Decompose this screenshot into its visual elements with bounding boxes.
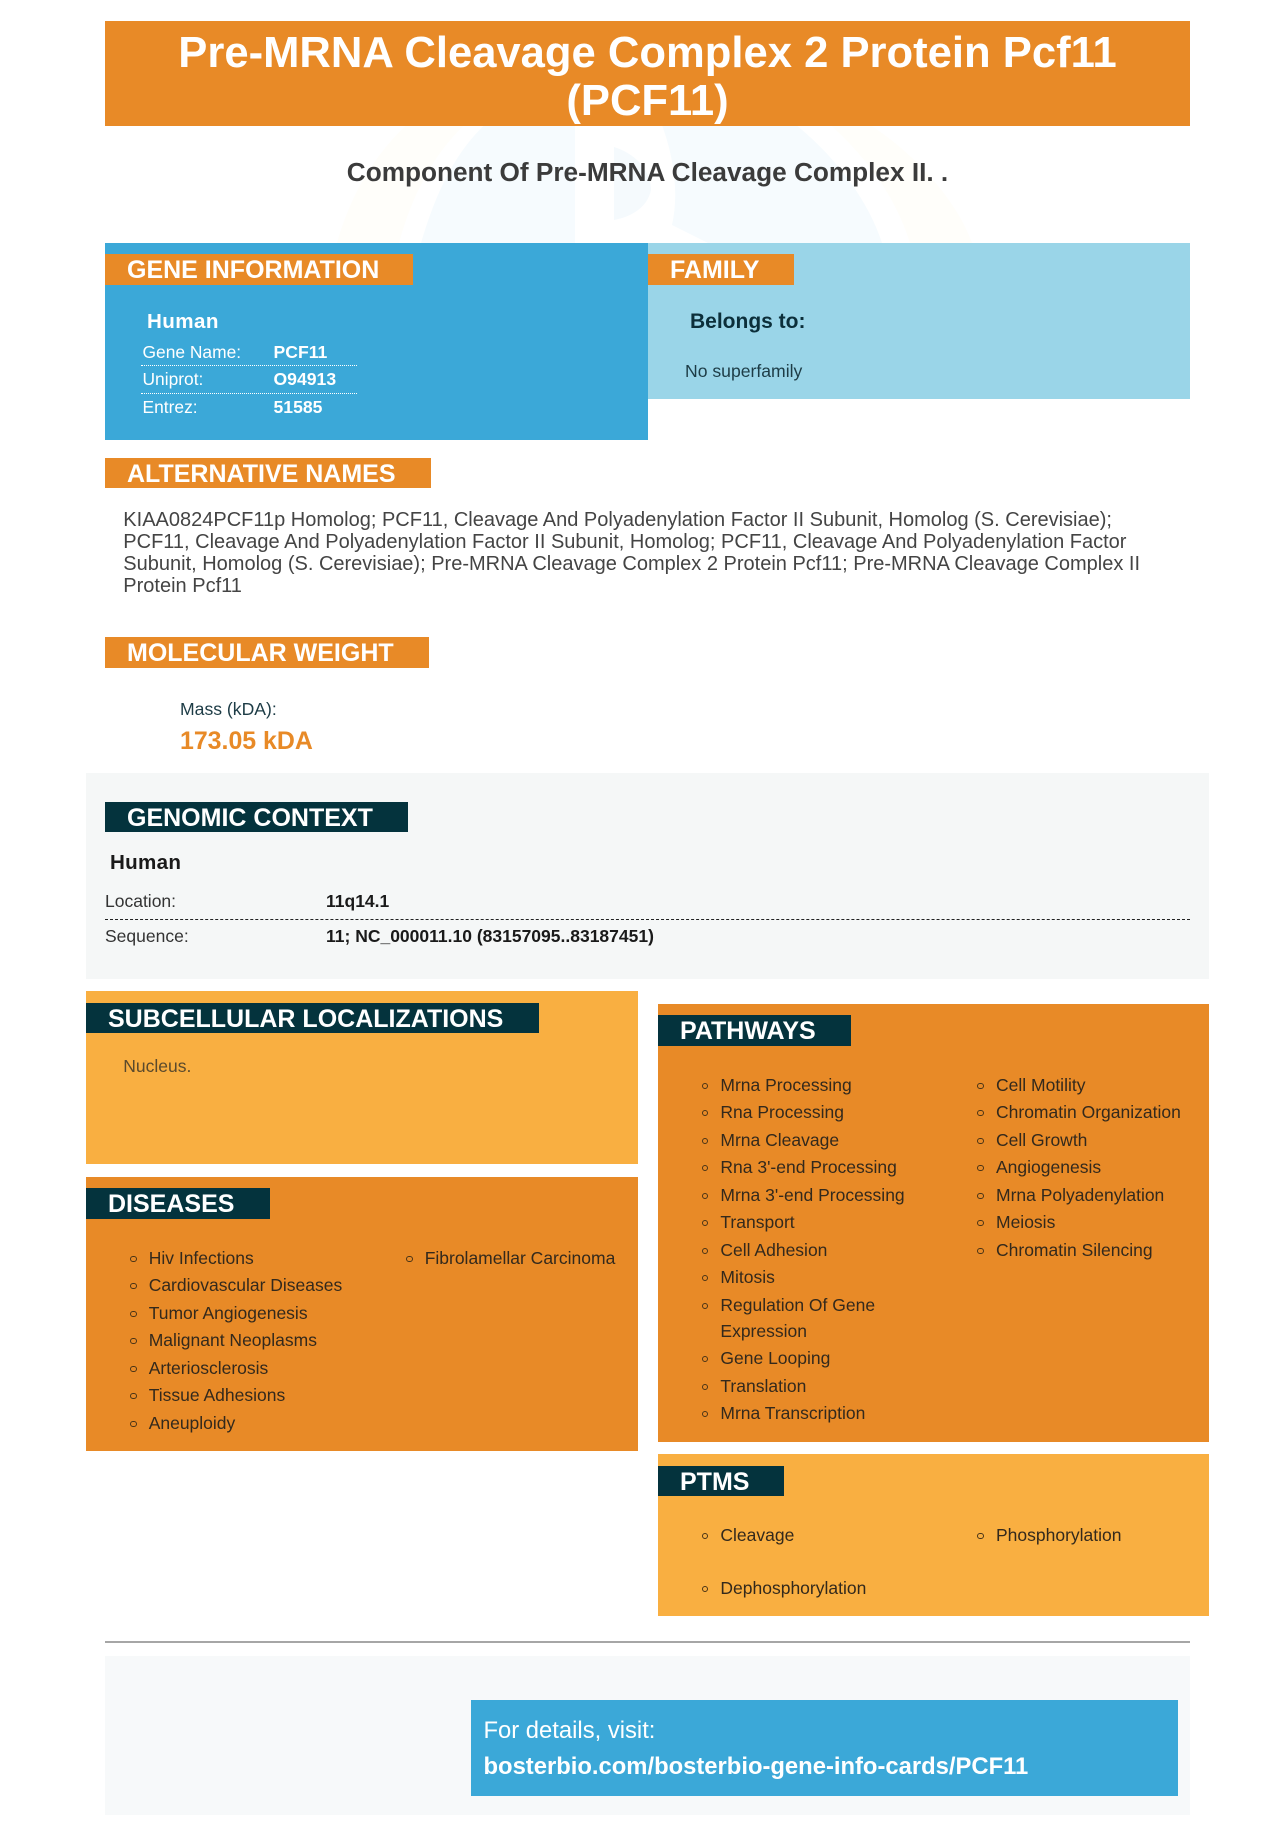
pathways list: Chromatin Silencing: [996, 1240, 1153, 1260]
heading: gene information: GENE INFORMATION: [127, 256, 379, 284]
gene name row: Gene Name:: [142, 342, 241, 362]
mass label: Mass (kDA):: [180, 698, 277, 718]
alternative names text: Subunit, Homolog (S. Cerevisiae); Pre-MRNA Cleavage Complex 2 Protein Pcf11; Pre-MRNA Cleavage Complex II: [123, 553, 1140, 575]
sequence row: 11; NC_000011.10 (83157095..83187451): [326, 926, 654, 946]
location row: [105, 886, 1190, 920]
heading: diseases: DISEASES: [108, 1190, 234, 1218]
heading: pathways: PATHWAYS: [680, 1016, 816, 1044]
panel: ptms: [658, 1454, 1209, 1616]
pathways list: Gene Looping: [720, 1348, 830, 1368]
pathways list: Cell Growth: [996, 1130, 1087, 1150]
diseases list: Arteriosclerosis: [149, 1358, 268, 1378]
panel: footer: [105, 1656, 1190, 1815]
diseases list: [130, 1248, 616, 1433]
sequence row: Sequence:: [105, 926, 189, 946]
heading: family: [648, 254, 794, 285]
heading: family: FAMILY: [670, 256, 759, 284]
location row: 11q14.1: [326, 891, 389, 911]
gene name row: [141, 337, 357, 366]
heading: alternative names: ALTERNATIVE NAMES: [127, 460, 396, 488]
diseases list: Fibrolamellar Carcinoma: [425, 1248, 615, 1268]
title banner: [105, 21, 1190, 126]
pathways list: Angiogenesis: [996, 1157, 1101, 1177]
heading: genomic context: GENOMIC CONTEXT: [127, 804, 373, 832]
panel: subcellular localizations: [86, 991, 638, 1164]
heading: ptms: [658, 1466, 784, 1496]
panel: diseases: [86, 1177, 638, 1451]
diseases list: Malignant Neoplasms: [149, 1330, 317, 1350]
heading: subcellular localizations: SUBCELLULAR LOCALIZATIONS: [108, 1005, 503, 1033]
pathways list: Cell Motility: [996, 1075, 1085, 1095]
entrez row: Entrez:: [142, 397, 198, 417]
pathways list: Rna Processing: [720, 1102, 844, 1122]
pathways list: Cell Adhesion: [720, 1240, 827, 1260]
ptms list: Dephosphorylation: [720, 1578, 866, 1598]
diseases list: Tumor Angiogenesis: [149, 1303, 308, 1323]
background watermark logo: [422, 126, 882, 243]
pathways list: Mrna 3'-end Processing: [720, 1185, 905, 1205]
panel: gene information: [105, 243, 648, 440]
alternative names text: [123, 509, 1140, 597]
pathways list: [702, 1075, 1181, 1423]
pathways list: Regulation Of Gene: [720, 1295, 875, 1315]
mass value: 173.05 kDA: [180, 727, 313, 755]
pathways list: Meiosis: [996, 1212, 1055, 1232]
visit label: For details, visit:: [484, 1716, 655, 1744]
uniprot row: O94913: [274, 369, 336, 389]
panel: family: [648, 243, 1190, 399]
location row: Location:: [105, 891, 176, 911]
heading: molecular weight: MOLECULAR WEIGHT: [127, 638, 394, 666]
pathways list: Mrna Cleavage: [720, 1130, 839, 1150]
species label: Human: [110, 851, 181, 874]
pathways list: Mrna Polyadenylation: [996, 1185, 1164, 1205]
alternative names text: Protein Pcf11: [123, 575, 242, 597]
pathways list: Rna 3'-end Processing: [720, 1157, 897, 1177]
ptms list: Cleavage: [720, 1525, 794, 1545]
url: bosterbio.com/bosterbio-gene-info-cards/PCF11: [484, 1752, 1028, 1780]
pathways list: Expression: [720, 1321, 807, 1341]
pathways list: Transport: [720, 1212, 795, 1232]
alternative names text: PCF11, Cleavage And Polyadenylation Factor II Subunit, Homolog; PCF11, Cleavage And Polyadenylation Factor: [123, 531, 1126, 553]
ptms list: [702, 1525, 1122, 1598]
heading: diseases: [86, 1188, 270, 1219]
superfamily value: No superfamily: [685, 361, 802, 381]
title banner: (PCF11): [566, 76, 729, 124]
panel: pathways: [658, 1004, 1209, 1442]
panel: genomic context: [86, 773, 1209, 979]
pathways list: Mrna Processing: [720, 1075, 852, 1095]
ptms list: Phosphorylation: [996, 1525, 1122, 1545]
entrez row: [142, 397, 322, 417]
diseases list: Tissue Adhesions: [149, 1385, 285, 1405]
subtitle: Component Of Pre-MRNA Cleavage Complex II. .: [347, 156, 948, 186]
pathways list: Chromatin Organization: [996, 1102, 1181, 1122]
heading: pathways: [658, 1015, 851, 1046]
belongs to label: Belongs to:: [690, 310, 806, 333]
callout: details link: [471, 1700, 1178, 1796]
heading: ptms: PTMS: [680, 1468, 749, 1496]
pathways list: Mitosis: [720, 1267, 775, 1287]
title banner: Pre-MRNA Cleavage Complex 2 Protein Pcf11: [178, 28, 1117, 76]
gene name row: PCF11: [274, 342, 327, 362]
pathways list: Translation: [720, 1376, 806, 1396]
sequence row: [105, 926, 654, 946]
uniprot row: [141, 366, 357, 394]
entrez row: 51585: [274, 397, 322, 417]
alternative names text: KIAA0824PCF11p Homolog; PCF11, Cleavage And Polyadenylation Factor II Subunit, Homolog (S. Cerevisiae);: [123, 509, 1112, 531]
diseases list: Hiv Infections: [149, 1248, 254, 1268]
species label: Human: [147, 310, 219, 332]
uniprot row: Uniprot:: [142, 369, 203, 389]
localization text: Nucleus.: [123, 1056, 191, 1076]
diseases list: Aneuploidy: [149, 1413, 235, 1433]
diseases list: Cardiovascular Diseases: [149, 1275, 342, 1295]
pathways list: Mrna Transcription: [720, 1403, 865, 1423]
